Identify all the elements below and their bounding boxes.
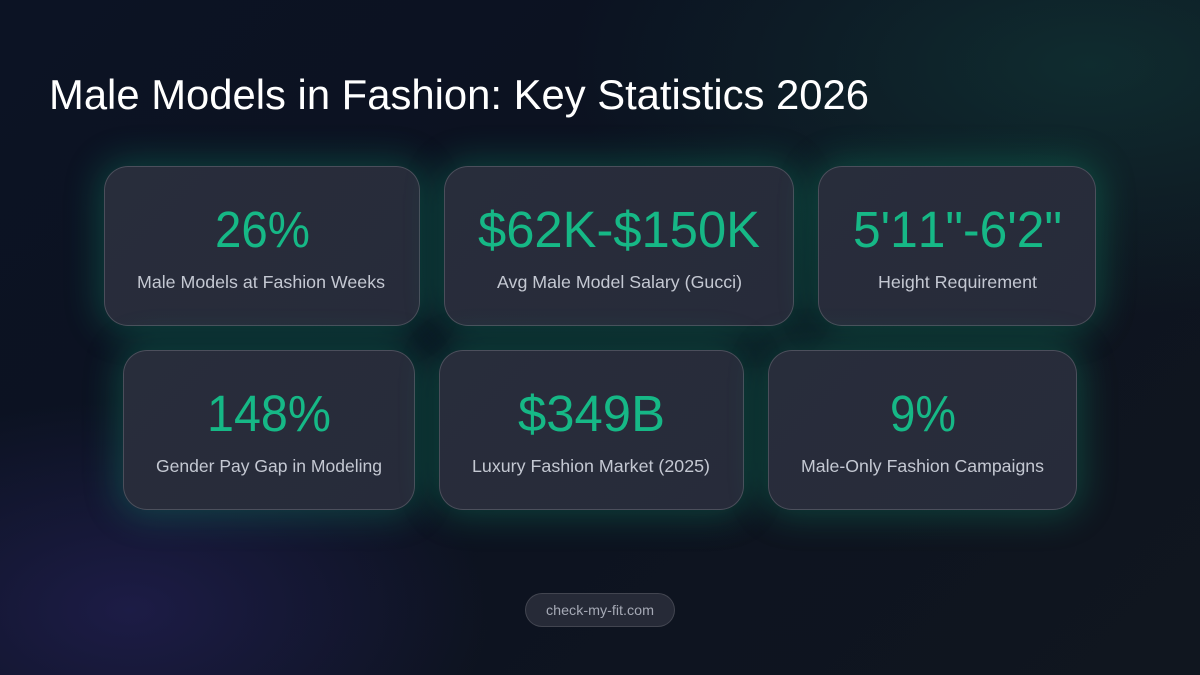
card: average male model salary: $62K-$150K <box>478 201 760 258</box>
source pill: check-my-fit.com <box>546 602 654 618</box>
card: average male model salary <box>444 166 794 326</box>
card: height requirement: Height Requirement <box>878 272 1037 292</box>
card: male models at fashion weeks <box>104 166 420 326</box>
card: male-only campaigns: 9% <box>890 385 956 442</box>
card: average male model salary: Avg Male Model Salary (Gucci) <box>497 272 742 292</box>
card: gender pay gap: 148% <box>207 385 331 442</box>
card: luxury fashion market: $349B <box>518 385 665 442</box>
card: gender pay gap: Gender Pay Gap in Modeling <box>156 456 382 476</box>
card: luxury fashion market <box>439 350 744 510</box>
card: height requirement <box>818 166 1096 326</box>
card: male models at fashion weeks: Male Models at Fashion Weeks <box>137 272 385 292</box>
card: male-only campaigns <box>768 350 1077 510</box>
card: male-only campaigns: Male-Only Fashion Campaigns <box>801 456 1044 476</box>
card: gender pay gap <box>123 350 415 510</box>
source pill <box>525 593 675 627</box>
card: luxury fashion market: Luxury Fashion Market (2025) <box>472 456 710 476</box>
card: height requirement: 5'11"-6'2" <box>853 201 1062 258</box>
card: male models at fashion weeks: 26% <box>215 201 310 258</box>
title: Male Models in Fashion: Key Statistics 2026 <box>49 71 869 118</box>
